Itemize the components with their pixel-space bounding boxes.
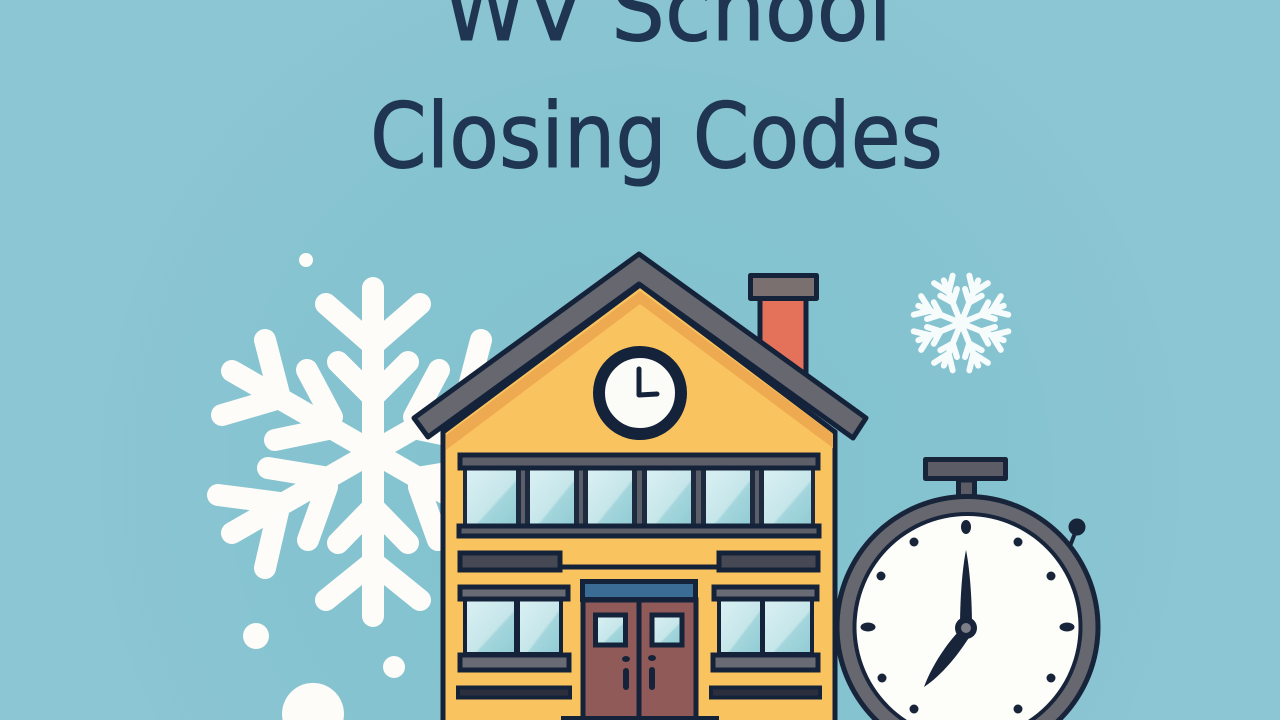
icon: small snowflake [914,276,1008,370]
chimney [750,276,816,388]
stopwatch button [926,460,1084,546]
icon: snow dots [243,253,405,720]
title: Closing Codes [370,84,943,189]
title [370,0,943,189]
lower right window [713,587,818,670]
stopwatch face [857,516,1078,720]
gable shadow [446,291,833,450]
base bars [458,688,820,720]
lower left window [460,587,569,670]
stopwatch hands [924,550,977,687]
building walls [443,285,835,720]
school building [414,254,866,720]
mid facade bars [460,553,818,570]
gable clock [599,352,681,434]
stopwatch case [834,494,1100,720]
icon: large snowflake [218,288,528,616]
stopwatch ticks [860,520,1074,714]
door [582,582,696,720]
icon: stopwatch [834,460,1100,720]
upper window row [459,455,819,536]
roof [414,254,866,438]
